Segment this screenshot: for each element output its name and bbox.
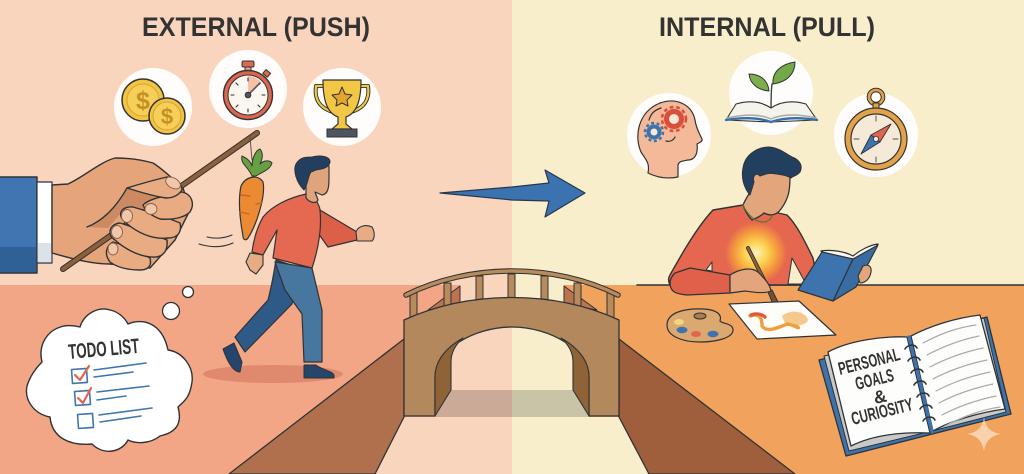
blue book (798, 244, 878, 301)
notebook text: GOALS (853, 365, 896, 394)
brush (748, 248, 783, 312)
heading: external: EXTERNAL (PUSH) (142, 12, 370, 42)
neck and face (306, 166, 329, 202)
notebook text: PERSONAL (836, 344, 902, 379)
shirt (668, 205, 818, 285)
todo heading: TODO LIST (67, 335, 140, 364)
far bank corners (428, 286, 597, 310)
heart glow (725, 222, 787, 284)
heading: internal: INTERNAL (PULL) (659, 12, 875, 42)
legs (235, 260, 322, 362)
paint palette (667, 309, 733, 342)
page edges (824, 318, 1006, 451)
cuff (37, 182, 52, 263)
stick (63, 133, 257, 269)
back arm (318, 210, 357, 247)
icon: stopwatch (209, 50, 287, 128)
river banks (229, 339, 795, 474)
shoes (223, 343, 334, 378)
motion lines (199, 235, 233, 247)
notebook text: & (872, 386, 889, 408)
ruled lines (923, 325, 1000, 426)
hand (246, 253, 263, 274)
reader figure (668, 147, 878, 312)
thought cloud: todo list (26, 309, 192, 451)
icon: coins: $ (161, 104, 173, 129)
fist (356, 226, 374, 241)
checklist (72, 363, 152, 428)
icon: coins: $ (136, 87, 150, 115)
palm (52, 158, 190, 268)
neck and face (743, 170, 790, 220)
pale river path under bridge (375, 285, 649, 474)
arch face (404, 298, 619, 416)
thumb and fingers (106, 177, 192, 270)
hand holding stick (0, 133, 257, 273)
watermark star (967, 417, 1001, 451)
gaps beside torso (706, 258, 806, 284)
icon: compass (834, 90, 918, 177)
spine (909, 337, 932, 432)
notebook text: CURIOSITY (849, 394, 915, 429)
open notebook (819, 315, 1011, 456)
sleeve (0, 177, 37, 273)
notebook text (836, 344, 915, 429)
torso (252, 194, 321, 268)
thought bubbles (162, 286, 194, 320)
background: external side (0, 0, 512, 474)
arm (670, 268, 730, 295)
painting on paper (729, 301, 836, 339)
icon: book with sprout (726, 51, 817, 135)
shadow (203, 365, 343, 383)
handrail (406, 271, 618, 295)
carrot on string (240, 137, 272, 240)
spiral binding (905, 345, 935, 421)
book hand (858, 265, 871, 283)
water shadow (435, 390, 589, 417)
icon: coins (114, 68, 192, 146)
cover (819, 317, 1011, 456)
runner figure (203, 156, 374, 383)
bridge (404, 271, 619, 417)
icon: trophy (303, 68, 381, 146)
arrow: external to internal (440, 170, 585, 217)
hair (295, 156, 330, 190)
railing posts (410, 274, 614, 320)
left page (828, 337, 930, 446)
painting hand (730, 269, 771, 293)
inner arch walls (435, 338, 589, 416)
right page (911, 315, 1005, 431)
hair (742, 147, 801, 195)
icon: head with gears (627, 93, 711, 178)
background: internal side (512, 0, 1024, 474)
